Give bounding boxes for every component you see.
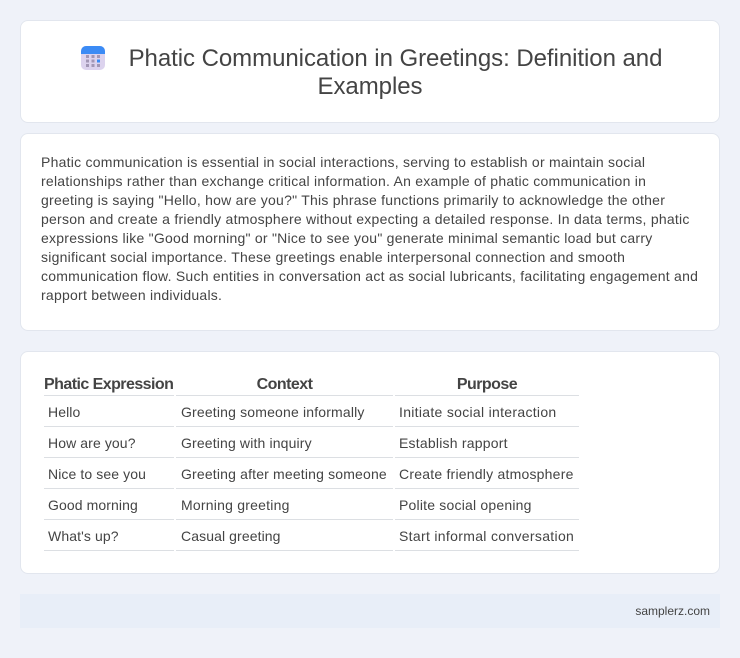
row 2: Greeting with inquiry	[181, 435, 312, 451]
row 4: Good morning	[48, 497, 138, 513]
row 1: Hello	[48, 404, 80, 420]
row 1	[48, 404, 557, 420]
row 3: Greeting after meeting someone	[181, 466, 387, 482]
row 1: Initiate social interaction	[399, 404, 557, 420]
table: Purpose	[457, 376, 517, 393]
row 5: Casual greeting	[181, 528, 281, 544]
title second line: Examples	[318, 73, 422, 100]
row 5	[48, 528, 574, 544]
table: Context	[257, 376, 312, 393]
intro paragraph: expressions like "Good morning" or "Nice to see you" generate minimal semantic load but carry	[41, 230, 652, 246]
panel: table card	[20, 351, 720, 574]
row 2	[48, 435, 508, 451]
intro paragraph: communication flow. Such entities in conversation act as social lubricants, facilitating engagement and	[41, 268, 698, 284]
footer source text: samplerz.com	[635, 604, 710, 618]
title: Phatic Communication in Greetings: Definition and	[129, 45, 662, 72]
table: Phatic Expression	[44, 376, 173, 393]
icon: calendar	[81, 46, 105, 70]
table header	[44, 376, 518, 393]
intro paragraph: person and create a friendly atmosphere without expecting a detailed response. In data terms, phatic	[41, 211, 690, 227]
intro paragraph: relationships rather than exchange critical information. An example of phatic communication in	[41, 173, 646, 189]
intro paragraph: Phatic communication is essential in social interactions, serving to establish or maintain social	[41, 154, 645, 170]
row 4: Polite social opening	[399, 497, 532, 513]
panel: intro paragraph card	[20, 133, 720, 331]
intro paragraph	[41, 154, 698, 303]
row 5: What's up?	[48, 528, 119, 544]
intro paragraph: rapport between individuals.	[41, 287, 222, 303]
row 3	[48, 466, 574, 482]
table	[44, 376, 579, 551]
row 3: Nice to see you	[48, 466, 146, 482]
row 3: Create friendly atmosphere	[399, 466, 574, 482]
panel: title card	[20, 20, 720, 123]
footer bar	[20, 594, 720, 628]
row 1: Greeting someone informally	[181, 404, 365, 420]
row 5: Start informal conversation	[399, 528, 574, 544]
intro paragraph: greeting is saying "Hello, how are you?" This phrase functions primarily to acknowledge the other	[41, 192, 665, 208]
row 4	[48, 497, 532, 513]
row 2: Establish rapport	[399, 435, 508, 451]
row 4: Morning greeting	[181, 497, 290, 513]
intro paragraph: significant social importance. These greetings enable interpersonal connection and smooth	[41, 249, 625, 265]
row 2: How are you?	[48, 435, 136, 451]
